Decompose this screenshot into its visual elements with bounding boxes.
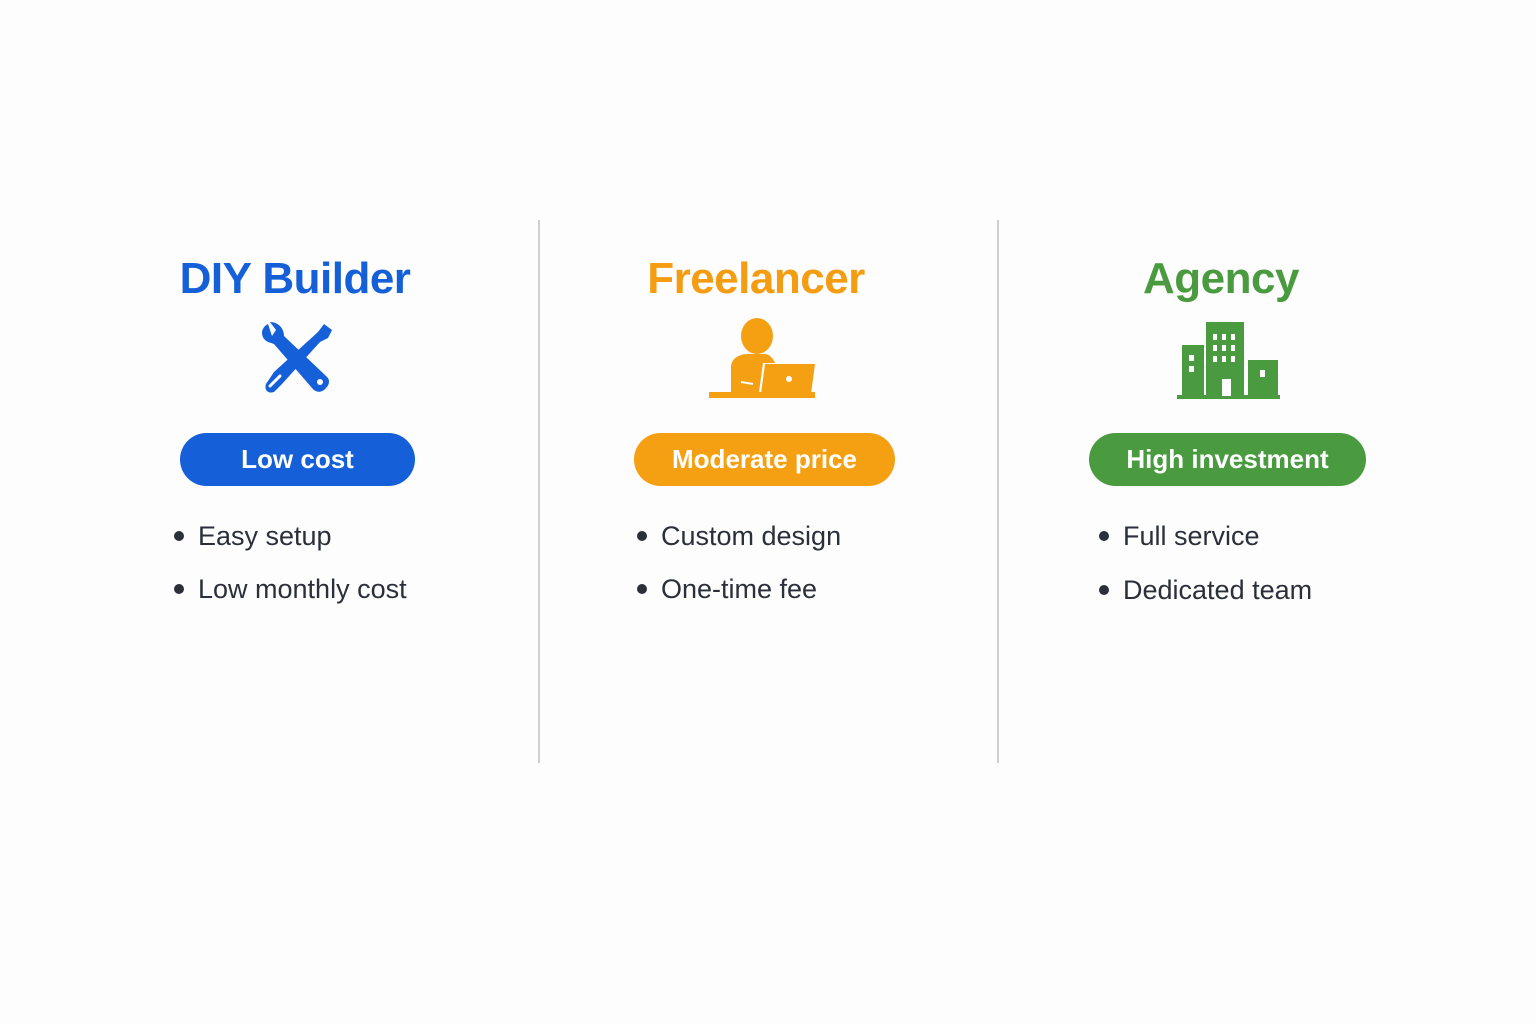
bullet list: Dedicated team — [1123, 575, 1312, 605]
pill: High investment — [1089, 433, 1366, 486]
bullet list: Easy setup — [198, 521, 332, 551]
panel: DIY Builder — [174, 254, 415, 604]
panel: Freelancer — [634, 254, 895, 604]
pill: Low cost — [180, 433, 415, 486]
icon: wrench and screwdriver — [262, 322, 332, 392]
heading: Freelancer: Freelancer — [647, 254, 865, 303]
pill: Moderate price: Moderate price — [672, 444, 857, 474]
bullet list — [174, 521, 407, 604]
bullet list: Full service — [1123, 521, 1260, 551]
heading: Agency: Agency — [1143, 254, 1299, 303]
icon: person with laptop — [709, 318, 815, 398]
bullet list — [637, 521, 841, 604]
bullet list: Low monthly cost — [198, 574, 407, 604]
panel: Agency — [1089, 254, 1366, 605]
pill: Moderate price — [634, 433, 895, 486]
icon: office building — [1177, 322, 1280, 399]
pill: High investment: High investment — [1126, 444, 1329, 474]
bullet list — [1099, 521, 1312, 605]
heading: DIY Builder: DIY Builder — [180, 254, 410, 303]
pill: Low cost: Low cost — [241, 444, 354, 474]
bullet list: One-time fee — [661, 574, 817, 604]
bullet list: Custom design — [661, 521, 841, 551]
